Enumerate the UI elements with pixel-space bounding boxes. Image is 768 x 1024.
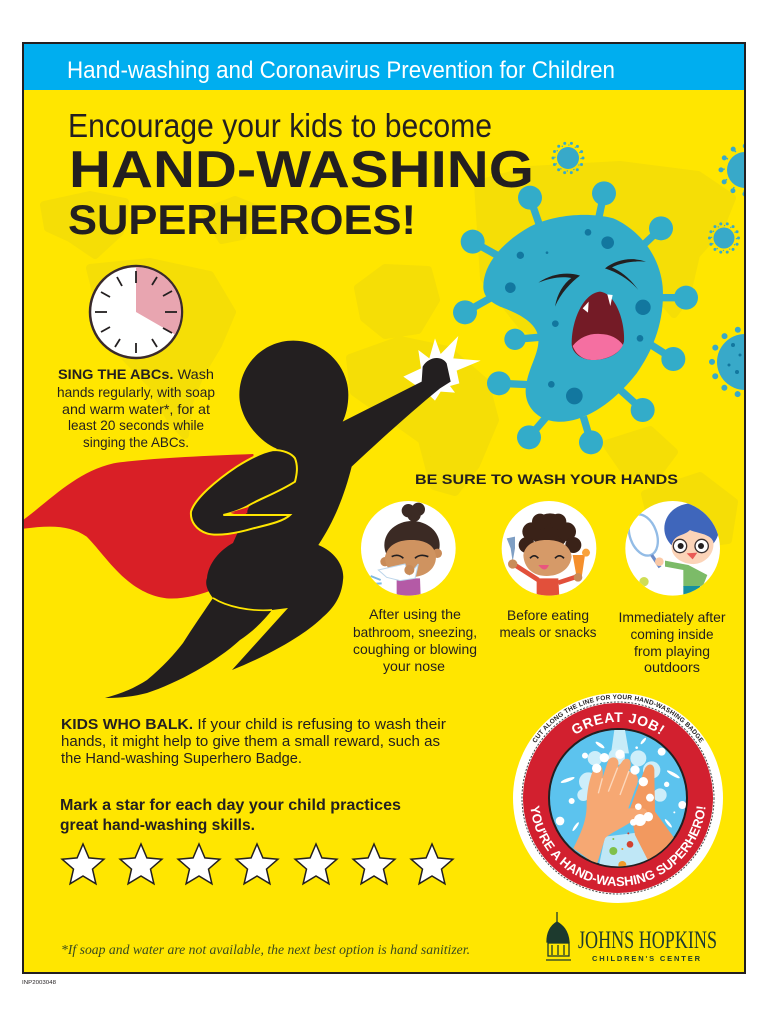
captions: meals or snacks	[500, 624, 596, 640]
sing the ABCs text: and warm water*, for at	[62, 401, 210, 417]
captions: Immediately after	[618, 609, 726, 625]
captions: bathroom, sneezing,	[353, 624, 477, 640]
cape	[24, 454, 260, 598]
captions: your nose	[383, 658, 445, 674]
kid illustrations	[361, 501, 720, 598]
star prompt: Mark a star for each day your child practices	[60, 797, 401, 814]
title: encourage: Encourage your kids to become	[68, 107, 492, 144]
captions: Before eating	[507, 607, 589, 623]
captions: After using the	[369, 606, 461, 622]
clock icon	[90, 266, 182, 358]
Johns Hopkins logo: CHILDREN'S CENTER	[592, 954, 701, 963]
kids who balk text: KIDS WHO BALK. If your child is refusing to wash their	[61, 717, 446, 733]
hand-washing badge: CUT ALONG THE LINE FOR YOUR HAND-WASHING BADGE	[532, 694, 704, 743]
header banner: Hand-washing and Coronavirus Prevention for Children	[67, 57, 615, 84]
section heading: be sure: BE SURE TO WASH YOUR HANDS	[415, 471, 678, 487]
footnote: *If soap and water are not available, the next best option is hand sanitizer.	[61, 943, 470, 958]
title: superheroes: SUPERHEROES!	[68, 196, 416, 243]
kids who balk text: hands, it might help to give them a small reward, such as	[61, 734, 440, 750]
header banner	[24, 44, 744, 90]
Johns Hopkins logo: JOHNS HOPKINS	[578, 927, 717, 954]
Johns Hopkins logo	[546, 912, 717, 963]
star prompt: great hand-washing skills.	[60, 817, 255, 834]
small virus icons	[553, 143, 768, 395]
captions: coughing or blowing	[353, 641, 477, 657]
impact burst	[403, 336, 481, 401]
body	[105, 341, 451, 698]
kids who balk text: the Hand-washing Superhero Badge.	[61, 751, 302, 767]
star prompt	[60, 797, 401, 834]
kid: blowing nose	[361, 501, 456, 597]
captions: from playing	[634, 643, 710, 659]
print code: INP2003048	[22, 980, 56, 986]
sing the ABCs text: hands regularly, with soap	[57, 384, 215, 400]
hand-washing badge	[513, 693, 723, 903]
sing the ABCs text: singing the ABCs.	[83, 434, 189, 450]
captions: coming inside	[630, 626, 714, 642]
captions: outdoors	[644, 659, 700, 675]
superhero silhouette	[24, 336, 481, 698]
sing the ABCs text: SING THE ABCs. Wash	[58, 366, 214, 382]
kid: eating	[502, 501, 596, 597]
sing the ABCs text: least 20 seconds while	[68, 417, 204, 433]
kids who balk text	[61, 717, 446, 767]
hand-washing badge: YOU'RE A HAND-WASHING SUPERHERO!	[530, 805, 706, 886]
kid: tennis	[624, 501, 720, 598]
sing the ABCs text	[57, 366, 215, 450]
world map background	[44, 165, 734, 545]
star tracker	[62, 844, 453, 884]
hand-washing badge: GREAT JOB!	[572, 712, 665, 734]
logo: dome	[546, 912, 571, 960]
captions	[353, 606, 726, 675]
arm with yellow outline	[191, 450, 297, 535]
title: hand-washing: HAND-WASHING	[69, 141, 534, 199]
main virus character	[453, 181, 698, 454]
